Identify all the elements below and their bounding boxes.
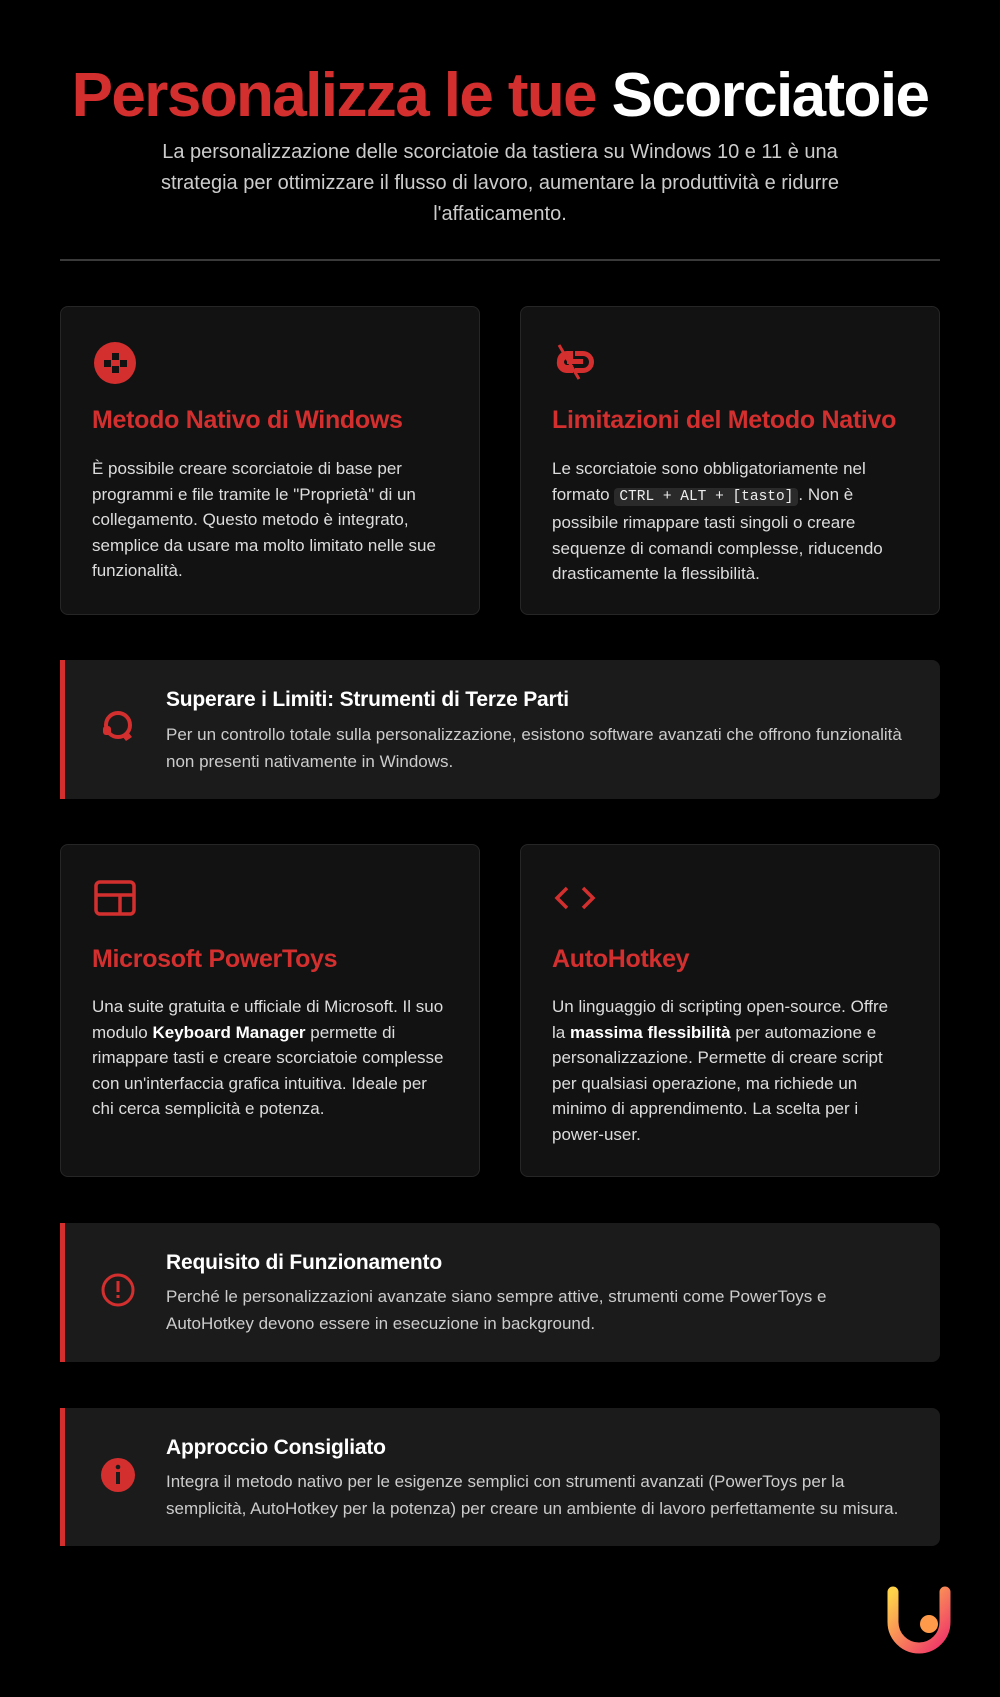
text: rimappare tasti e creare scorciatoie complesse: [92, 1048, 443, 1067]
text: non presenti nativamente in Windows.: [166, 752, 453, 771]
icon: info: [101, 1458, 135, 1492]
callout: approccio: [60, 1408, 940, 1546]
text: personalizzazione. Permette di creare script: [552, 1048, 883, 1067]
callout: requisito: [60, 1223, 940, 1362]
heading: Limitazioni del Metodo Nativo: [552, 406, 896, 434]
icon: headset: [103, 711, 132, 741]
icon: code: [554, 886, 596, 910]
panel: metodo nativo: [60, 306, 480, 615]
text: [552, 997, 888, 1144]
icon: unlink: [556, 344, 594, 380]
text: Perché le personalizzazioni avanzate siano sempre attive, strumenti come PowerToys e: [166, 1287, 826, 1306]
subtitle: strategia per ottimizzare il flusso di lavoro, aumentare la produttività e ridurre: [161, 172, 839, 194]
text: power-user.: [552, 1125, 641, 1144]
icon: gamepad: [94, 342, 136, 384]
heading: Microsoft PowerToys: [92, 945, 337, 973]
icon: warning: [102, 1274, 134, 1306]
text: Le scorciatoie sono obbligatoriamente nel formato CTRL + ALT + [tasto] . Non è possibile rimappare tasti singoli o creare sequenze di comandi complesse, riducendo drasticamente la flessibilità.: [552, 459, 883, 583]
text: Una suite gratuita e ufficiale di Microsoft. Il suo: [92, 997, 443, 1016]
text: minimo di apprendimento. La scelta per i: [552, 1099, 858, 1118]
subtitle: La personalizzazione delle scorciatoie da tastiera su Windows 10 e 11 è una: [162, 141, 838, 163]
text: Integra il metodo nativo per le esigenze semplici con strumenti avanzati (PowerToys per la: [166, 1472, 844, 1491]
heading: Requisito di Funzionamento: [166, 1251, 442, 1274]
heading: Approccio Consigliato: [166, 1436, 386, 1459]
text: modulo Keyboard Manager permette di: [92, 1023, 395, 1042]
heading: Superare i Limiti: Strumenti di Terze Parti: [166, 688, 569, 711]
text: [92, 997, 443, 1118]
panel: powertoys: [60, 844, 480, 1177]
text: [166, 1472, 898, 1518]
logo: [888, 1586, 950, 1654]
icon: layout: [94, 880, 136, 916]
text: Un linguaggio di scripting open-source. Offre: [552, 997, 888, 1016]
heading: AutoHotkey: [552, 945, 689, 973]
text: AutoHotkey devono essere in esecuzione in background.: [166, 1314, 595, 1333]
panel: autohotkey: [520, 844, 940, 1177]
panel: limitazioni: [520, 306, 940, 615]
title: Personalizza le tue Scorciatoie: [72, 61, 928, 130]
text: È possibile creare scorciatoie di base per programmi e file tramite le "Proprietà" di un collegamento. Questo metodo è integrato, semplice da usare ma molto limitato nelle sue funzionalità.: [92, 459, 436, 580]
text: con un'interfaccia grafica intuitiva. Ideale per: [92, 1074, 427, 1093]
text: Per un controllo totale sulla personalizzazione, esistono software avanzati che offrono funzionalità: [166, 725, 902, 744]
text: per qualsiasi operazione, ma richiede un: [552, 1074, 857, 1093]
text: la massima flessibilità per automazione e: [552, 1023, 876, 1042]
callout: terze parti: [60, 660, 940, 799]
subtitle: l'affaticamento.: [433, 203, 567, 225]
text: [166, 725, 902, 771]
heading: Metodo Nativo di Windows: [92, 406, 403, 434]
subtitle: [161, 141, 839, 225]
text: chi cerca semplicità e potenza.: [92, 1099, 324, 1118]
text: [166, 1287, 826, 1333]
text: semplicità, AutoHotkey per la potenza) per creare un ambiente di lavoro perfettamente su misura.: [166, 1499, 898, 1518]
